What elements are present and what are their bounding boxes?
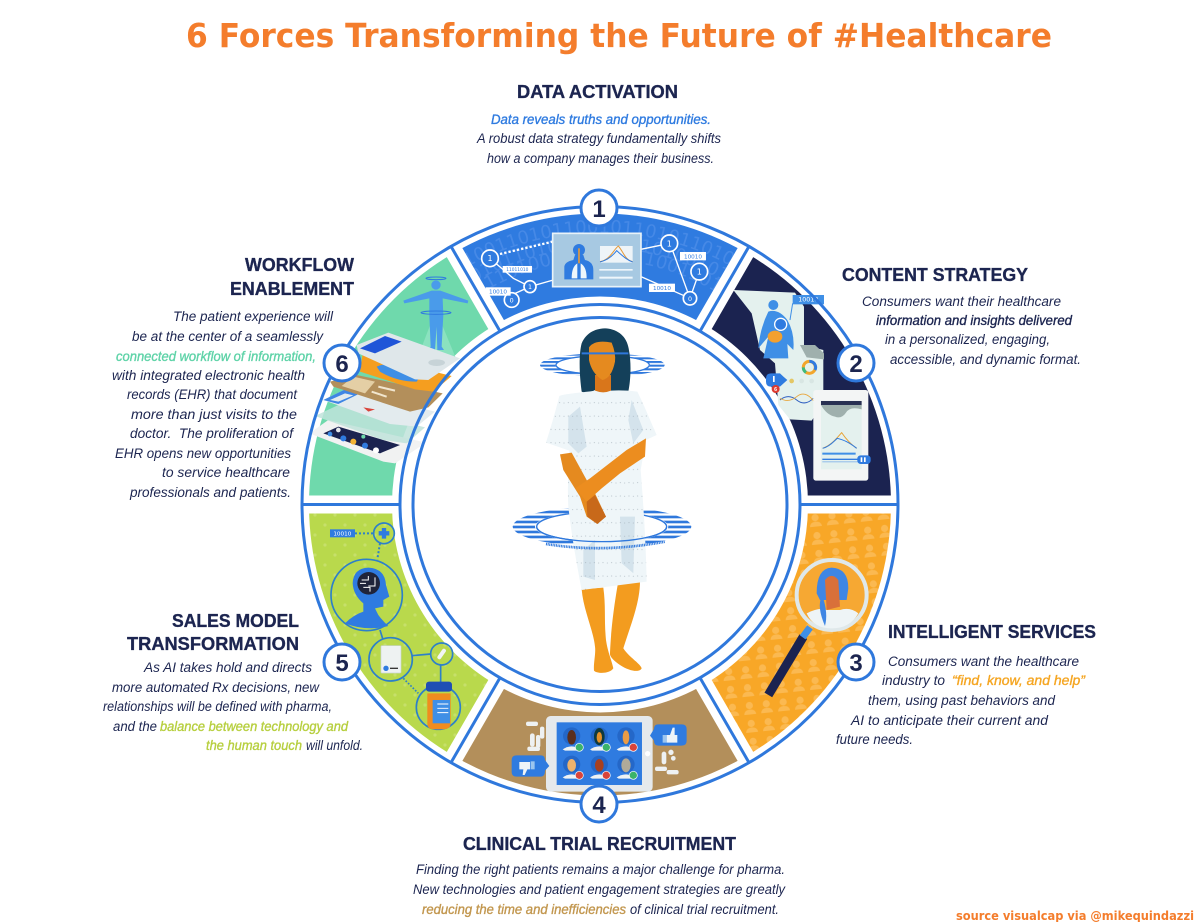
number badge 2: 2 xyxy=(849,351,863,378)
icon: thumbs up bubble xyxy=(650,724,687,746)
icon: tablet of patients xyxy=(546,716,653,792)
segment 3: intelligent services xyxy=(704,504,891,756)
icon: pill xyxy=(431,643,453,665)
description: reducing the time and inefficiencies xyxy=(422,902,626,917)
description: “find, know, and help” xyxy=(952,673,1086,688)
description xyxy=(413,862,786,917)
scan rings back xyxy=(513,353,691,547)
segment 1: data activation: 1 xyxy=(528,284,532,291)
description: Consumers want their healthcare xyxy=(862,294,1061,309)
description: connected workflow of information, xyxy=(116,349,316,364)
block: content strategy xyxy=(842,264,1081,367)
description: how a company manages their business. xyxy=(487,151,714,166)
description: Consumers want the healthcare xyxy=(888,654,1079,669)
icon: human figure xyxy=(403,277,468,360)
patient xyxy=(546,328,657,673)
description: more than just visits to the xyxy=(131,407,297,422)
description: future needs. xyxy=(836,732,913,747)
number badge 1 xyxy=(581,190,617,226)
heading: CLINICAL TRIAL RECRUITMENT xyxy=(463,833,737,854)
heading: DATA ACTIVATION xyxy=(517,81,678,102)
description: them, using past behaviors and xyxy=(868,693,1055,708)
segment 1: data activation: 1 xyxy=(667,239,672,248)
block: workflow enablement xyxy=(112,254,355,500)
wheel diagram xyxy=(300,188,900,824)
description: of clinical trial recruitment. xyxy=(630,902,779,917)
segment 1: data activation xyxy=(462,214,738,320)
number badge 2 xyxy=(838,345,874,381)
description: doctor. The proliferation of xyxy=(130,426,294,441)
description: As AI takes hold and directs xyxy=(143,660,312,675)
icon: plus node: 10010 xyxy=(333,531,352,537)
segment 1: data activation: 11011010 xyxy=(506,267,529,273)
number badge 4: 4 xyxy=(592,792,606,819)
number badge 4 xyxy=(581,786,617,822)
description: accessible, and dynamic format. xyxy=(890,352,1081,367)
description: professionals and patients. xyxy=(129,485,291,500)
wheel frame lines xyxy=(302,206,898,802)
block: data activation xyxy=(476,81,721,166)
description: records (EHR) that document xyxy=(127,387,298,402)
icon: clipboard xyxy=(369,638,412,681)
icon: alert bubble xyxy=(766,373,787,393)
description xyxy=(103,660,363,753)
segment 1: data activation: 10010 xyxy=(684,254,702,260)
heading: CONTENT STRATEGY xyxy=(842,264,1029,285)
description: more automated Rx decisions, new xyxy=(112,680,320,695)
number badge 5: 5 xyxy=(335,650,349,677)
icon: lung screen xyxy=(553,233,641,287)
segment 5: sales model transformation xyxy=(309,504,496,756)
number badge 3: 3 xyxy=(849,650,863,677)
description: to service healthcare xyxy=(162,465,290,480)
heading: ENABLEMENT xyxy=(230,278,355,299)
icon: magnifier xyxy=(768,560,867,695)
description xyxy=(836,654,1086,747)
number badge 6 xyxy=(324,345,360,381)
pills xyxy=(526,722,679,774)
icon: alert bubble: 6 xyxy=(774,387,777,393)
number badge 5 xyxy=(324,644,360,680)
segment 1: data activation: 1 xyxy=(697,268,702,277)
icon: thumbs down bubble xyxy=(512,755,549,777)
description: with integrated electronic health xyxy=(112,368,305,383)
scan ring fronts xyxy=(537,353,667,548)
heading: INTELLIGENT SERVICES xyxy=(888,621,1096,642)
heading xyxy=(127,610,299,654)
central patient figure xyxy=(513,328,691,673)
description xyxy=(862,294,1081,367)
description: balance between technology and xyxy=(160,719,348,734)
segment 1: data activation: 10010 xyxy=(489,290,507,296)
segment 4: clinical trial recruitment xyxy=(454,685,746,795)
title: 6 Forces Transforming the Future of #Healthcare xyxy=(186,16,1052,55)
description: Data reveals truths and opportunities. xyxy=(491,112,711,127)
description: A robust data strategy fundamentally shifts xyxy=(476,131,721,146)
description: in a personalized, engaging, xyxy=(885,332,1050,347)
heading: WORKFLOW xyxy=(245,254,355,275)
icon: pill bottle xyxy=(416,682,460,729)
segment 1: data activation: 1 xyxy=(487,254,493,263)
heading: TRANSFORMATION xyxy=(127,633,299,654)
heading: SALES MODEL xyxy=(172,610,299,631)
description: and the xyxy=(113,719,157,734)
segment 6: workflow enablement xyxy=(309,252,496,504)
description: AI to anticipate their current and xyxy=(850,713,1048,728)
description: the human touch xyxy=(206,738,302,753)
segment 2: content strategy: 10010 xyxy=(798,297,818,304)
description: industry to xyxy=(882,673,945,688)
description xyxy=(476,112,721,166)
segment 1: data activation: 0 xyxy=(510,298,514,305)
description: The patient experience will xyxy=(173,309,334,324)
block: clinical trial recruitment xyxy=(413,833,786,917)
block: sales model transformation xyxy=(103,610,363,753)
description: relationships will be defined with pharma, xyxy=(103,699,332,714)
description: information and insights delivered xyxy=(876,313,1072,328)
segment 1: data activation: 10010 xyxy=(653,286,671,292)
heading xyxy=(230,254,355,299)
description: New technologies and patient engagement strategies are greatly xyxy=(413,882,786,897)
description xyxy=(112,309,334,500)
number badge 1: 1 xyxy=(592,196,606,223)
description: EHR opens new opportunities xyxy=(115,446,291,461)
icon: tablet chart xyxy=(813,390,871,481)
description: Finding the right patients remains a major challenge for pharma. xyxy=(416,862,785,877)
description: be at the center of a seamlessly xyxy=(132,329,324,344)
icon: plus node xyxy=(330,523,394,544)
number badge 6: 6 xyxy=(335,351,349,378)
number badge 3 xyxy=(838,644,874,680)
segment 2: content strategy xyxy=(704,252,891,504)
block: intelligent services xyxy=(836,621,1096,747)
icon: AI head xyxy=(331,559,402,631)
segment 1: data activation: 0 xyxy=(688,296,692,303)
icon: body scan xyxy=(758,300,794,358)
icon: layered records and phone xyxy=(309,333,460,463)
description: will unfold. xyxy=(306,738,363,753)
